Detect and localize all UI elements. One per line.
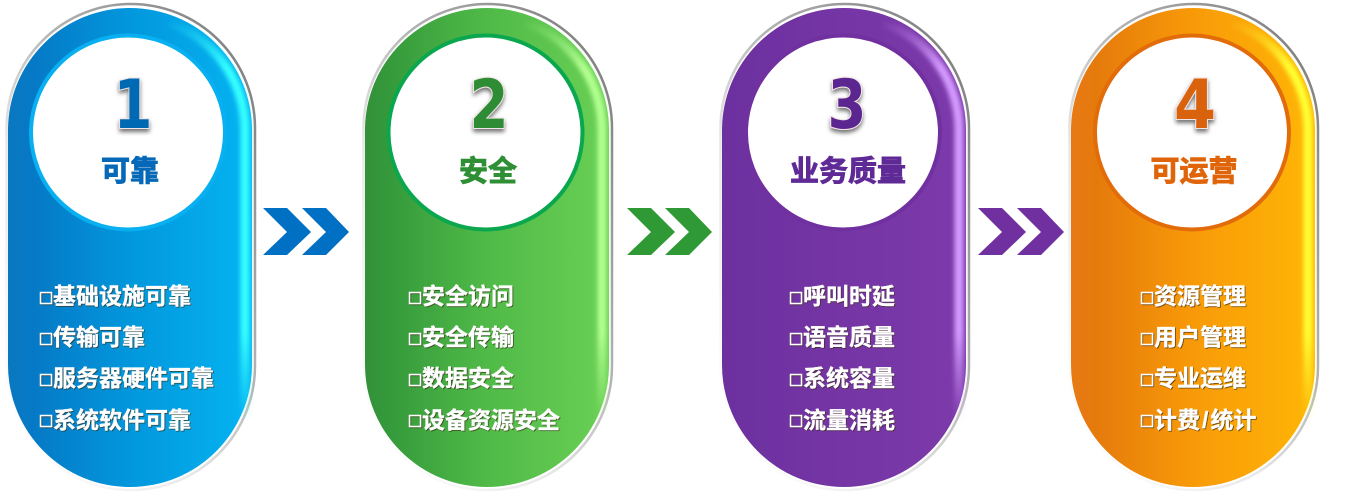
list: 可靠 items: 传输可靠 [53, 324, 145, 350]
list: 业务质量 items: 流量消耗 [803, 407, 895, 433]
list: 业务质量 items [790, 283, 895, 433]
arrow: purple chevrons [978, 208, 1064, 255]
list: 可运营 items: 计费/统计 [1154, 407, 1256, 433]
circle: blue [31, 36, 225, 230]
panel: 安全 [364, 4, 612, 490]
list: 可运营 items [1142, 283, 1256, 433]
circle: orange [1095, 36, 1289, 230]
list: 安全 items: 设备资源安全 [422, 407, 560, 433]
list: 可靠 items: 服务器硬件可靠 [53, 365, 214, 391]
pill body: orange [1070, 4, 1318, 490]
list: 安全 items [410, 283, 560, 433]
circle: purple [746, 36, 940, 230]
list: 安全 items: 数据安全 [422, 365, 514, 391]
list: 可靠 items: 基础设施可靠 [53, 283, 191, 309]
arrow: green chevrons [627, 208, 712, 255]
panel: 业务质量 [720, 4, 969, 490]
number 3: 3 [828, 66, 866, 145]
list: 可靠 items [40, 283, 214, 433]
number 2: 2 [470, 66, 508, 145]
arrow: blue chevrons [263, 208, 349, 255]
list: 可运营 items: 专业运维 [1154, 365, 1246, 391]
panel: 可运营 [1070, 4, 1318, 490]
list: 可运营 items: 用户管理 [1154, 324, 1246, 350]
pill body: blue [6, 4, 255, 490]
list: 安全 items: 安全传输 [422, 324, 514, 350]
pill body: green [364, 4, 612, 490]
panel: 可靠 [6, 4, 255, 490]
list: 业务质量 items: 语音质量 [803, 324, 895, 350]
circle: green [388, 36, 582, 230]
number 4: 4 [1174, 66, 1216, 145]
heading: 可靠: 可靠 [101, 155, 159, 188]
list: 业务质量 items: 系统容量 [803, 365, 895, 391]
list: 可靠 items: 系统软件可靠 [53, 407, 191, 433]
number 1: 1 [114, 66, 152, 145]
heading: 业务质量: 业务质量 [790, 155, 906, 188]
list: 可运营 items: 资源管理 [1154, 283, 1246, 309]
heading: 可运营: 可运营 [1150, 155, 1238, 188]
list: 业务质量 items: 呼叫时延 [803, 283, 895, 309]
heading: 安全: 安全 [459, 155, 517, 188]
pill body: purple [720, 4, 969, 490]
list: 安全 items: 安全访问 [422, 283, 514, 309]
